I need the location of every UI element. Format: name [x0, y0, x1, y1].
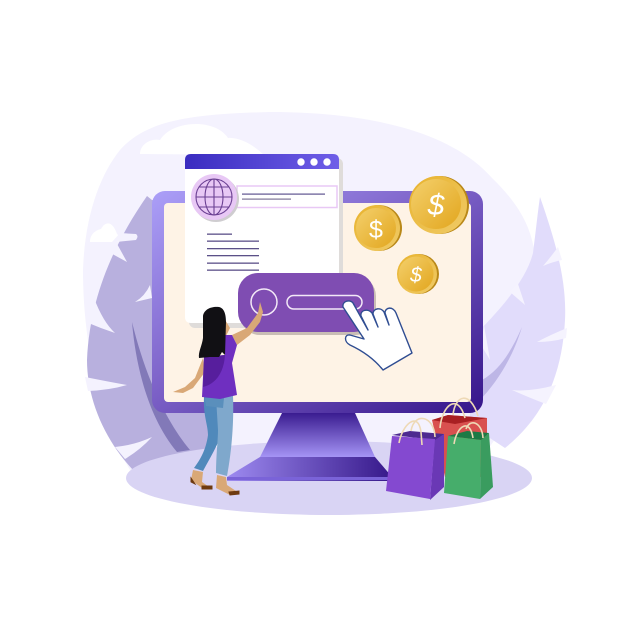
action panel	[238, 273, 376, 335]
hair	[199, 307, 226, 358]
background blob	[83, 112, 536, 470]
monitor	[152, 191, 483, 413]
left leaf	[85, 196, 210, 470]
jeans pocket	[205, 398, 224, 408]
coin: medium: $	[369, 216, 383, 244]
red bag	[432, 398, 487, 477]
monitor stand	[227, 413, 392, 481]
browser window	[185, 154, 343, 328]
window control dots	[297, 158, 331, 166]
shopping bags	[386, 398, 493, 500]
address bar	[237, 186, 337, 208]
right leaf vein	[478, 327, 522, 402]
icon: pointing hand cursor	[343, 301, 412, 370]
shirt	[202, 335, 237, 399]
right leaf	[470, 197, 567, 448]
left leaf vein	[132, 322, 190, 452]
left foot	[191, 470, 212, 489]
round button	[251, 289, 277, 315]
monitor screen	[164, 203, 471, 402]
left sandal	[191, 478, 212, 489]
lowered arm	[173, 358, 205, 393]
ground ellipse	[126, 441, 532, 515]
icon: globe	[191, 174, 239, 222]
clouds	[90, 124, 264, 242]
back leg	[194, 397, 222, 471]
raised arm	[232, 302, 263, 345]
window title bar	[185, 154, 339, 169]
woman pressing button	[173, 302, 263, 495]
coin: large: $	[427, 189, 446, 222]
right foot	[216, 475, 239, 495]
text lines	[207, 234, 259, 271]
coin: small: $	[409, 264, 422, 287]
green bag	[444, 423, 493, 499]
front leg	[216, 396, 233, 476]
purple bag	[386, 418, 444, 500]
coin: large	[409, 176, 469, 234]
neck	[220, 318, 230, 336]
right sandal	[229, 491, 239, 495]
coin: small	[397, 254, 439, 294]
shirt shadow	[203, 355, 225, 387]
coin: medium	[354, 205, 402, 251]
pill button	[287, 296, 362, 309]
